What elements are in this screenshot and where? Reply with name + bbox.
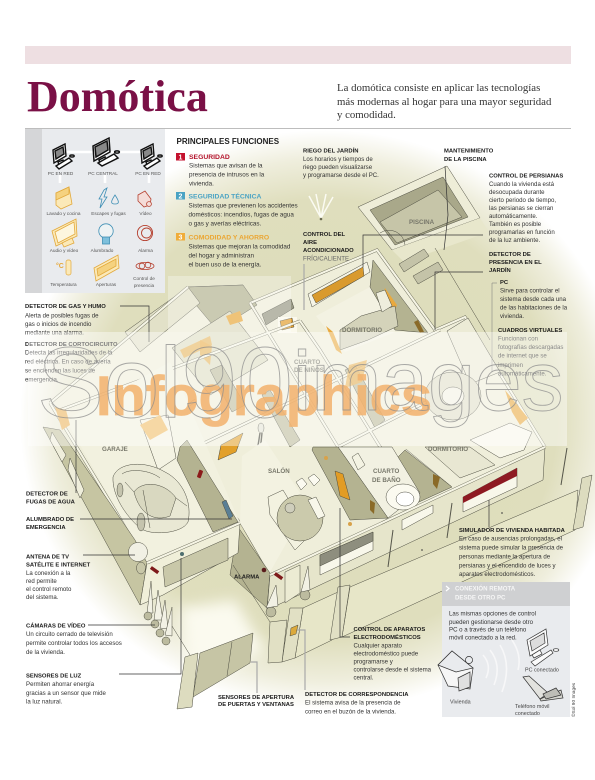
label: persianas: las persianas se cierran [489, 205, 553, 212]
panel labels: row 4: Control de [133, 276, 155, 281]
label: mantenimiento: MANTENIMIENTO [444, 149, 494, 155]
perimeter wall [268, 475, 592, 663]
label: detector de cortocircuito: red eléctrica. En caso de avería [25, 358, 111, 366]
label: alumbrado de emergencia: EMERGENCIA [26, 525, 66, 531]
function 3: el buen uso de la energía. [188, 262, 262, 268]
function 1 [176, 153, 265, 188]
label: simulador: persianas y el encendido de luces y [459, 562, 556, 569]
icon: alumbrado [99, 224, 113, 244]
bathroom: DE BAÑO [372, 477, 401, 484]
label: detector de correspondencia [305, 692, 409, 715]
label: cuadros virtuales: automáticamente. [498, 370, 547, 378]
label: cuadros virtuales: CUADROS VIRTUALES [498, 328, 562, 334]
icon: PC en red 2 [141, 144, 162, 169]
panel labels: row 3: Alarma [138, 248, 153, 253]
label: fugas de agua: DETECTOR DE [26, 492, 68, 498]
main bedroom [308, 260, 428, 354]
label: control de aparatos: Cualquier aparato [354, 642, 403, 649]
orange box panel [278, 317, 297, 333]
person [257, 423, 264, 452]
garage side wall [177, 440, 238, 532]
label: riego del jardín: y programarse desde el PC. [303, 172, 379, 179]
icon: lavado y cocina [56, 187, 72, 209]
labels: PC conectado [525, 668, 559, 674]
panel labels: row 3: Alumbrado [91, 248, 114, 253]
emergency light [222, 500, 233, 519]
panel labels: row 2: Vídeo [139, 211, 152, 216]
porch wall [230, 527, 270, 608]
label: detector de cortocircuito: Detecta las irregularidades de la [25, 350, 113, 356]
panel text [449, 610, 536, 642]
garage floor and car [43, 362, 240, 605]
front yard [180, 600, 265, 690]
panel header: DESDE OTRO PC [455, 594, 506, 602]
label: PC: Sirve para controlar el [500, 288, 560, 294]
kitchen orange units [180, 311, 243, 365]
bath window [402, 505, 433, 530]
label: control de aparatos: controlarse desde el sistema [354, 666, 432, 673]
icon: temperatura: °C [56, 262, 64, 270]
label: cuadros virtuales: de internet que se [498, 352, 547, 360]
label: cámaras de vídeo: Un circuito cerrado de televisión [26, 631, 113, 638]
intro text: La domótica consiste en aplicar las tecnologías [337, 82, 540, 94]
label: fugas de agua: FUGAS DE AGUA [26, 500, 76, 506]
icon: alarma [137, 225, 153, 241]
panel labels: row 2 [47, 211, 152, 216]
label: detector de cortocircuito: emergencia. [25, 376, 59, 384]
icon: video [138, 191, 151, 207]
label: cámaras de vídeo [26, 622, 122, 656]
salon window [320, 532, 373, 575]
label: persianas: programarlas en función [489, 229, 555, 236]
label: persianas: También es posible [489, 221, 542, 228]
label: antena: red permite [26, 578, 57, 585]
function 3 [176, 233, 291, 268]
icon: PC central [93, 138, 119, 166]
label: detector de gas y humo: mediante una alarma. [25, 330, 84, 336]
garage floor and car: GARAJE [102, 446, 128, 453]
intro text [337, 82, 552, 121]
ground background [20, 130, 595, 710]
sun loungers [399, 249, 443, 284]
panel labels: row 4: presencia [134, 283, 155, 288]
label: control de aparatos [354, 627, 432, 681]
label: control de aparatos: ELECTRODOMÉSTICOS [354, 633, 421, 641]
label: presencia: DETECTOR DE [489, 252, 531, 258]
label: alarma: ALARMA [234, 574, 260, 580]
label: antena: ANTENA DE TV [26, 554, 69, 560]
label: detector de correspondencia: DETECTOR DE CORRESPONDENCIA [305, 692, 409, 698]
icon: PC en red [53, 144, 74, 169]
function 3: 3 [178, 234, 182, 242]
cameras [144, 566, 310, 645]
shaded interior walls [135, 365, 385, 447]
label: detector de cortocircuito: se encienden las luces de [25, 368, 96, 374]
watermark: Infographics: Infographics [96, 364, 432, 427]
labels: Teléfono móvil [515, 704, 549, 710]
signal waves [483, 640, 519, 692]
car [113, 464, 189, 533]
function 1: 1 [178, 154, 182, 162]
icon: PC conectado [527, 629, 559, 666]
labels: Vivienda [450, 700, 471, 706]
label: cuadros virtuales: fotografías descargadas [498, 344, 563, 351]
leader lines [76, 166, 497, 693]
label: simulador: En caso de ausencias prolongadas, el [459, 536, 562, 542]
panel labels: row 3 [50, 248, 153, 253]
kitchen back wall [188, 285, 257, 330]
label: persianas: automáticamente. [489, 213, 538, 220]
panel labels: row 2: Lavado y cocina [47, 211, 81, 216]
label: cámaras de vídeo: CÁMARAS DE VÍDEO [26, 622, 86, 630]
path beyond pool [435, 248, 490, 340]
label: PC: de las habitaciones de la [500, 304, 568, 312]
labels [450, 668, 559, 717]
label: cámaras de vídeo: de la vivienda. [26, 649, 65, 656]
illustration: house [43, 166, 592, 709]
garden lights [388, 448, 567, 567]
icon: audio y video [52, 219, 77, 247]
panel header: CONEXIÓN REMOTA [455, 584, 516, 592]
label: detector de gas y humo: gas o inicios de incendio [25, 321, 92, 328]
label: control de aparatos: programarse y [354, 658, 394, 665]
label: antena: La conexión a la [26, 570, 71, 577]
house floor plan [50, 250, 545, 575]
credit: ©Sol 90 Images [570, 682, 577, 717]
orange wall panels in middle [345, 360, 367, 388]
label: sensores de apertura: SENSORES DE APERTURA [218, 695, 295, 701]
interior walls [60, 303, 450, 523]
right front wall [267, 447, 545, 610]
gate [177, 633, 253, 709]
icon: control de presencia [136, 262, 154, 270]
icon: vivienda [438, 651, 473, 691]
pool [358, 166, 489, 262]
red detector [197, 470, 203, 478]
heading: principales funciones: PRINCIPALES FUNCIONES [176, 137, 280, 146]
label: cuadros virtuales: Funcionan con [498, 336, 538, 342]
function 1: presencia de intrusos en la [189, 172, 265, 178]
watermark: Sol90images: Sol90 [37, 327, 293, 439]
panel text: Las mismas opciones de control [449, 610, 536, 618]
label: PC: PC [500, 280, 509, 286]
function 3: del hogar y administran [188, 252, 254, 260]
bathroom [338, 447, 452, 518]
antenna dish [128, 542, 148, 562]
label: simulador: SIMULADOR DE VIVIENDA HABITADA [459, 528, 566, 534]
walls, back and right [250, 250, 545, 447]
label: riego del jardín: RIEGO DEL JARDÍN [303, 147, 358, 155]
label: presencia [489, 252, 542, 274]
label: cuadros virtuales [498, 328, 563, 378]
main bedroom: DORMITORIO [342, 327, 382, 334]
panel text: móvil conectado a la red. [449, 634, 517, 642]
panel labels: row 4 [50, 276, 155, 288]
orange floor panel [218, 433, 243, 460]
label: riego del jardín: riego pueden visualizarse [303, 164, 373, 171]
garage front [140, 523, 240, 605]
label: antena: el control remoto [26, 586, 72, 593]
label: detector de cortocircuito [25, 342, 118, 384]
top divider [25, 128, 571, 129]
utility room [312, 447, 388, 526]
function 2: SEGURIDAD TÉCNICA [188, 192, 261, 200]
label: detector de gas y humo: Alerta de posibles fugas de [25, 312, 99, 319]
icon: escapes y fugas [99, 188, 118, 208]
panel header [442, 582, 570, 606]
title: Domótica [27, 72, 208, 121]
panel labels: PCs: PC EN RED [48, 171, 74, 176]
function 2 [176, 192, 298, 228]
label: cuadros virtuales: imprimen [498, 362, 523, 369]
label: sensores de luz: la luz natural. [26, 698, 63, 706]
label: detector de cortocircuito: DETECTOR DE CORTOCIRCUITO [25, 342, 118, 348]
label: room cuarto [294, 359, 324, 374]
label: antena: SATÉLITE E INTERNET [26, 560, 91, 568]
label: detector de correspondencia: El sistema avisa de la presencia de [305, 700, 401, 707]
panel text: PC o a través de un teléfono [449, 626, 527, 634]
function 2: Sistemas que previenen los accidentes [188, 202, 298, 210]
label: persianas: Cuando la vivienda está [489, 181, 555, 188]
label: PC: sistema desde cada una [500, 296, 567, 303]
label: mantenimiento [444, 149, 494, 163]
label: riego del jardín [303, 147, 379, 179]
icon: teléfono móvil [523, 676, 563, 701]
label: simulador: aparatos electrodomésticos. [459, 571, 536, 578]
label: alumbrado de emergencia: ALUMBRADO DE [26, 517, 74, 523]
front door [285, 565, 300, 603]
label: simulador [459, 528, 566, 578]
watermark overlay [28, 276, 567, 446]
label: control del aire: ACONDICIONADO [303, 248, 354, 254]
intro text: más modernas al hogar para una mayor seguridad [337, 96, 552, 108]
panel: network icons [25, 129, 165, 293]
label: persianas: cierto periodo de tiempo, [489, 197, 556, 204]
function 2: 2 [178, 194, 182, 200]
label: mantenimiento: DE LA PISCINA [444, 157, 487, 163]
label: simulador: personas mediante la apertura de [459, 554, 551, 560]
label: sensores de luz: Permiten ahorrar energía [26, 681, 95, 688]
label: persianas: de la luz ambiente. [489, 237, 540, 244]
label: presencia: JARDÍN [489, 266, 511, 274]
function 3: Sistemas que mejoran la comodidad [188, 244, 291, 250]
label: control del aire: CONTROL DEL [303, 232, 346, 238]
label: antena: del sistema. [26, 594, 59, 601]
label: control del aire: FRÍO/CALIENTE [303, 256, 349, 262]
panel labels: row 3: Audio y vídeo [50, 248, 79, 253]
icon: aperturas [94, 255, 119, 281]
function 2: o gas y averías eléctricas. [188, 220, 262, 228]
grille back wall [262, 299, 294, 325]
label: control de aparatos: central. [354, 674, 374, 681]
label: control de aparatos: CONTROL DE APARATOS [354, 627, 425, 633]
panel labels: row 2: Escapes y fugas [91, 211, 126, 216]
label: control de aparatos: electrodoméstico puede [354, 650, 419, 658]
sprinkler [309, 194, 333, 220]
label: detector de gas y humo: DETECTOR DE GAS Y HUMO [25, 304, 106, 310]
watermark: Sol90images: images [293, 334, 564, 428]
label: antena [26, 554, 91, 601]
label: riego del jardín: Los horarios y tiempos de [303, 156, 373, 163]
alarm sensors [150, 566, 159, 574]
label: persianas: CONTROL DE PERSIANAS [489, 174, 563, 180]
label: room cuarto: CUARTO [294, 359, 321, 366]
label: sensores de luz: SENSORES DE LUZ [26, 674, 82, 680]
main functions block [176, 137, 298, 268]
label: sensores de apertura: DE PUERTAS Y VENTANAS [218, 702, 294, 708]
label: PC: vivienda. [500, 313, 524, 320]
label: control del aire [303, 232, 354, 262]
label: fugas de agua [26, 492, 76, 506]
pool: PISCINA [409, 219, 435, 226]
salon: SALÓN [268, 467, 290, 475]
labels: conectado [515, 711, 540, 717]
panel labels: row 4: Temperatura [50, 282, 77, 287]
label: simulador: sistema puede simular la presencia de [459, 544, 564, 551]
red shutter window [463, 468, 517, 512]
function 2: domésticos: incendios, fugas de agua [188, 212, 294, 218]
label: sensores de luz [26, 674, 107, 706]
panel labels: PCs: PC EN RED [135, 171, 161, 176]
label: presencia: PRESENCIA EN EL [489, 260, 542, 266]
label: cámaras de vídeo: permite controlar todos los accesos [26, 640, 122, 647]
label: control del aire: AIRE [303, 240, 317, 246]
right dormitorio: DORMITORIO [428, 446, 468, 453]
right dormitorio [425, 318, 532, 478]
label: detector de correspondencia: correo en el buzón de la vivienda. [305, 708, 396, 715]
function 1: vivienda. [189, 180, 214, 188]
header band [25, 46, 571, 64]
label: sensores de apertura [218, 695, 295, 708]
function 3: COMODIDAD Y AHORRO [188, 234, 269, 242]
icon: temperatura [56, 260, 71, 275]
salon [240, 440, 325, 572]
panel text: pueden gestionarse desde otro [449, 619, 534, 626]
label: sensores de luz: gracias a un sensor que mide [26, 690, 107, 697]
label: room cuarto: DE NIÑOS [294, 367, 324, 374]
label: persianas [489, 174, 563, 244]
function 1: SEGURIDAD [189, 154, 230, 161]
panel labels: row 4: Aperturas [96, 282, 117, 287]
label: alumbrado de emergencia [26, 517, 74, 531]
panel: conexión remota [438, 582, 570, 717]
panel labels: PCs: PC CENTRAL [88, 171, 118, 176]
intro text: y comodidad. [337, 109, 396, 121]
label: persianas: desocupada durante [489, 189, 545, 196]
panel labels: PCs [48, 171, 161, 176]
label: detector de gas y humo [25, 304, 106, 336]
bathroom: CUARTO [373, 468, 400, 475]
label: PC [500, 280, 568, 320]
function 1: Sistemas que avisan de la [189, 162, 263, 170]
